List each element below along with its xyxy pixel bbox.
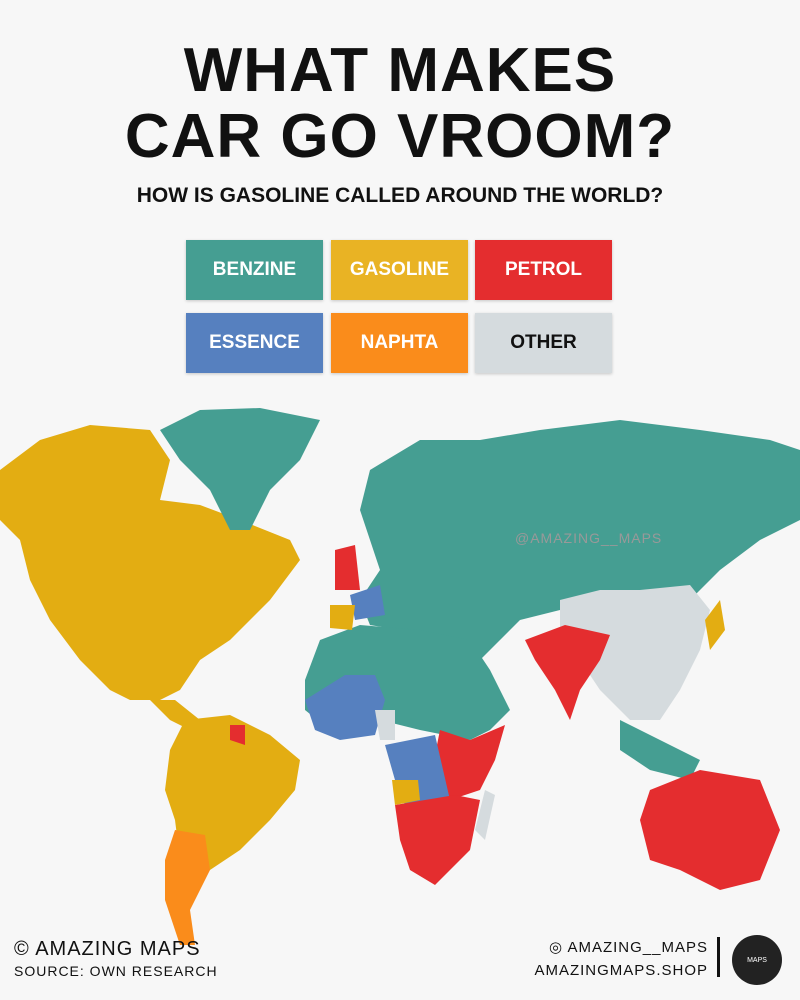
legend: naphta <box>331 313 468 373</box>
legend: other: OTHER <box>510 332 577 353</box>
legend: essence <box>186 313 323 373</box>
legend: essence: ESSENCE <box>209 332 300 353</box>
text: AMAZINGMAPS.SHOP <box>534 962 708 979</box>
logo <box>732 935 782 985</box>
greenland <box>160 408 320 530</box>
africa <box>305 625 510 885</box>
world map <box>0 408 800 945</box>
logo: MAPS <box>747 956 767 964</box>
watermark: @AMAZING__MAPS <box>515 530 662 546</box>
spain gasoline <box>330 605 355 630</box>
footer left: © AMAZING MAPS <box>14 938 201 960</box>
north america <box>0 425 300 730</box>
footer right: ◎ AMAZING__MAPS <box>549 939 708 956</box>
title <box>125 36 675 171</box>
legend: gasoline: GASOLINE <box>350 259 449 280</box>
legend: benzine <box>186 240 323 300</box>
eurasia benzine <box>360 420 800 780</box>
legend: petrol <box>475 240 612 300</box>
china other <box>560 585 710 720</box>
legend: naphta: NAPHTA <box>361 332 438 353</box>
india petrol <box>525 625 610 720</box>
subtitle: HOW IS GASOLINE CALLED AROUND THE WORLD? <box>137 184 663 207</box>
legend: petrol: PETROL <box>505 259 582 280</box>
legend: benzine: BENZINE <box>213 259 296 280</box>
title: WHAT MAKES <box>184 36 616 105</box>
france essence <box>350 585 385 620</box>
south america <box>165 715 300 945</box>
japan gasoline <box>705 600 725 650</box>
australia petrol <box>640 770 780 890</box>
legend: other <box>475 313 612 373</box>
text: SOURCE: OWN RESEARCH <box>14 963 218 979</box>
legend <box>184 240 614 376</box>
legend: gasoline <box>331 240 468 300</box>
uk petrol <box>335 545 360 590</box>
title: CAR GO VROOM? <box>125 102 675 171</box>
